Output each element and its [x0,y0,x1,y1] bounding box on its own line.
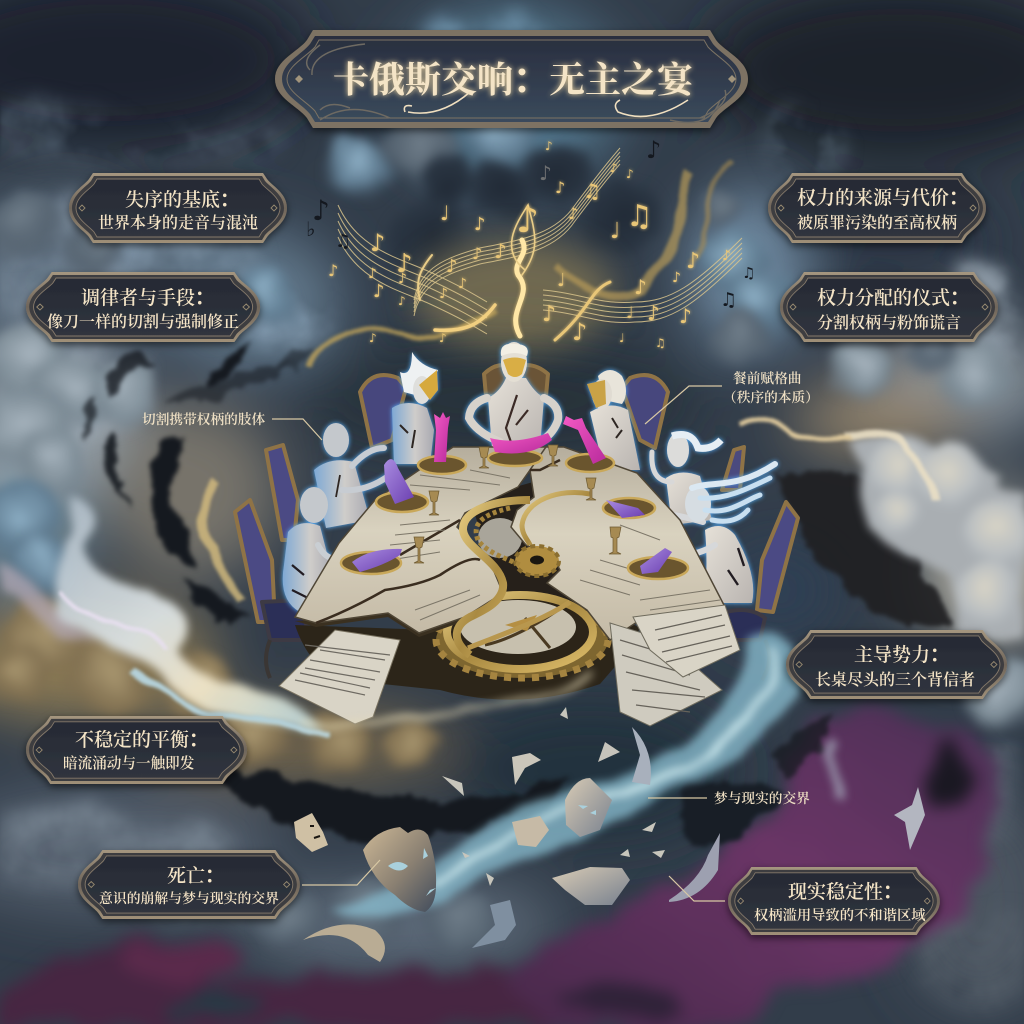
ink: black swirling strokes [78,342,953,850]
smoke: cream cloud on the right [845,434,1024,640]
smoke: wisps [60,160,935,730]
label: prelude fugue: 餐前赋格曲 [733,370,801,386]
heading: 权力的来源与代价： [797,183,968,210]
chart: music staves and notes: ♩ [557,270,566,291]
table: right slab [511,447,725,640]
chart: music staves and notes: ♪ [312,194,330,227]
chart: music staves and notes: ♪ [646,136,661,164]
chart: music staves and notes: ♪ [458,276,467,292]
figure: left blue [314,423,387,528]
chart: music staves and notes: ♪ [572,318,587,346]
mask: lower fragment [472,900,516,948]
mask: fragment [512,753,541,785]
chart: music staves and notes: ♪ [328,261,338,280]
sheet: hanging score left [279,630,400,724]
figure: upper-right masked [587,370,640,470]
label: severed limbs [142,411,322,440]
chart: music staves and notes: ♩ [619,331,625,345]
panel: title [275,30,748,128]
sheet: table-top score [390,470,720,620]
chart: music staves and notes: ♪ [568,204,578,223]
smoke: feathered left plume [0,495,325,728]
mask: tiny shards [442,707,665,886]
heading: 主导势力： [854,640,949,667]
mask: right shard [669,833,720,902]
chart: music staves and notes: ♪ [672,270,681,286]
table: cracks [316,460,560,623]
sheet: hanging score right [633,605,740,677]
panel: tuners and methods [26,272,260,342]
limbs: severed pink arms [434,412,606,464]
panel: source and price of power [768,173,986,243]
heading: 权力分配的仪式： [817,283,969,310]
panel: dominant forces [786,630,1007,699]
gear: clock diagonal arm [468,602,570,648]
figure: right rear ghost [652,433,721,525]
chart: music staves and notes: ♪ [679,304,692,328]
label: prelude fugue: （秩序的本质） [723,389,819,405]
table: cracked table with gears [279,412,740,726]
heading: 调律者与手段： [81,283,214,310]
chart: music staves and notes: ♪ [686,249,700,274]
chart: music staves and notes: ♪ [439,331,447,345]
chart: music staves and notes: ♩ [610,219,620,244]
chart: music staves and notes: ♪ [396,249,413,279]
figure: upper-left flame-haired [392,352,438,464]
text: 世界本身的走音与混沌 [98,213,258,232]
chart: music staves and notes: ♪ [539,161,552,185]
chart: music staves and notes: ♭ [306,217,315,241]
chart: music staves and notes: ♫ [335,231,351,252]
mask: torn pale wisp [894,787,925,850]
label: prelude fugue [645,370,819,424]
figure: right front ghost [642,464,775,603]
chart: music staves and notes: ♪ [516,200,539,241]
plates: gold rim dinner plates [341,450,688,579]
heading: title text: 卡俄斯交响：无主之宴 [333,51,695,103]
text: 被原罪污染的至高权柄 [797,213,957,232]
text: 像刀一样的切割与强制修正 [47,312,239,331]
sheet: hanging score center-right [610,623,722,726]
chart: music staves and notes: ♪ [610,161,618,175]
chart: music staves and notes: ♩ [440,201,449,225]
mask: crescent [303,924,385,962]
heading: 不稳定的平衡： [75,725,208,752]
mask: broken wide [552,867,630,905]
panel: reality stability [728,867,940,935]
chart: music staves and notes: ♪ [634,275,647,299]
connector: death to mask [302,860,380,885]
chart: music staves and notes [306,136,755,350]
chart: music staves and notes: ♪ [439,286,448,302]
gear: large clock gear [436,595,608,678]
figure: left front [283,487,400,612]
heading: 死亡： [167,861,224,888]
chart: music staves and notes: ♫ [626,199,653,234]
chart: music staves and notes: ♪ [373,281,384,302]
chairs: ornate gold frames with purple backs [235,365,798,680]
panel: unstable balance [26,716,247,784]
table: back left slab [295,447,546,633]
mask: fragment with hole [512,816,549,847]
gear: golden S ribbon [457,500,530,655]
region: purple abuse zone [0,702,1002,1024]
mask: triangular shard [598,742,620,762]
text: 暗流涌动与一触即发 [63,754,195,772]
label: dream and reality: 梦与现实的交界 [714,790,810,806]
chart: music staves and notes: ♪ [647,301,660,325]
chart: music staves and notes: ♪ [369,331,377,345]
limbs: severed purple arms [352,459,672,574]
chart: music staves and notes: ♪ [472,244,482,263]
text: 分割权柄与粉饰谎言 [817,313,961,332]
goblets: brass cups [414,445,621,563]
text: 权柄滥用导致的不和谐区域 [754,906,926,924]
chart: music staves and notes: ♪ [474,214,486,235]
chart: music staves and notes: ♪ [370,229,385,257]
chart: music staves and notes: ♪ [494,239,507,263]
light: warm glow behind music [415,240,615,350]
panel: disorder foundation [69,173,287,243]
chart: music staves and notes: ♫ [720,289,737,311]
mask: broken face [565,778,612,837]
gear: small gear [515,546,559,576]
mask: small [294,813,328,852]
masks: floating broken masks [294,707,925,962]
chart: music staves and notes: ♩ [626,303,634,322]
smoke: foreground river of pale mist [300,634,841,918]
chart: music staves and notes: ♫ [742,264,755,282]
gear: inner S teeth [476,508,520,565]
chart: music staves and notes: ♪ [545,139,553,153]
panel: ritual of power division [780,272,998,342]
table: wood body [295,612,640,700]
heading: 现实稳定性： [788,877,902,904]
table: under-gap mechanism base [440,480,610,660]
chart: music staves and notes: ♫ [655,336,666,350]
chart: music staves and notes: ♫ [583,179,601,203]
chart: music staves and notes: ♪ [626,167,634,181]
connector: stability to shard [669,876,725,901]
heading: 失序的基底： [125,185,239,212]
mask: crescent shard [632,727,651,785]
table: slab underside shadow [295,560,503,637]
text: 意识的崩解与梦与现实的交界 [99,890,279,906]
gear: golden arc [522,492,590,545]
chart: music staves and notes: ♪ [398,271,407,287]
chart: music staves and notes: ♪ [368,266,377,282]
gear: inner upper clock [478,518,522,558]
panel: death [78,850,300,919]
chart: music staves and notes: ♪ [555,178,565,197]
chart: music staves and notes: ♪ [446,256,458,277]
figures: seated fractured bodies [283,342,775,612]
chart: music staves and notes: ♪ [398,294,406,308]
label: severed limbs: 切割携带权柄的肢体 [142,411,266,427]
figure: center masked figure [469,342,558,447]
text: 长桌尽头的三个背信者 [815,670,975,689]
chart: music staves and notes: ♪ [722,248,731,264]
chart: music staves and notes: ♪ [542,302,556,327]
mask: large [363,827,436,912]
